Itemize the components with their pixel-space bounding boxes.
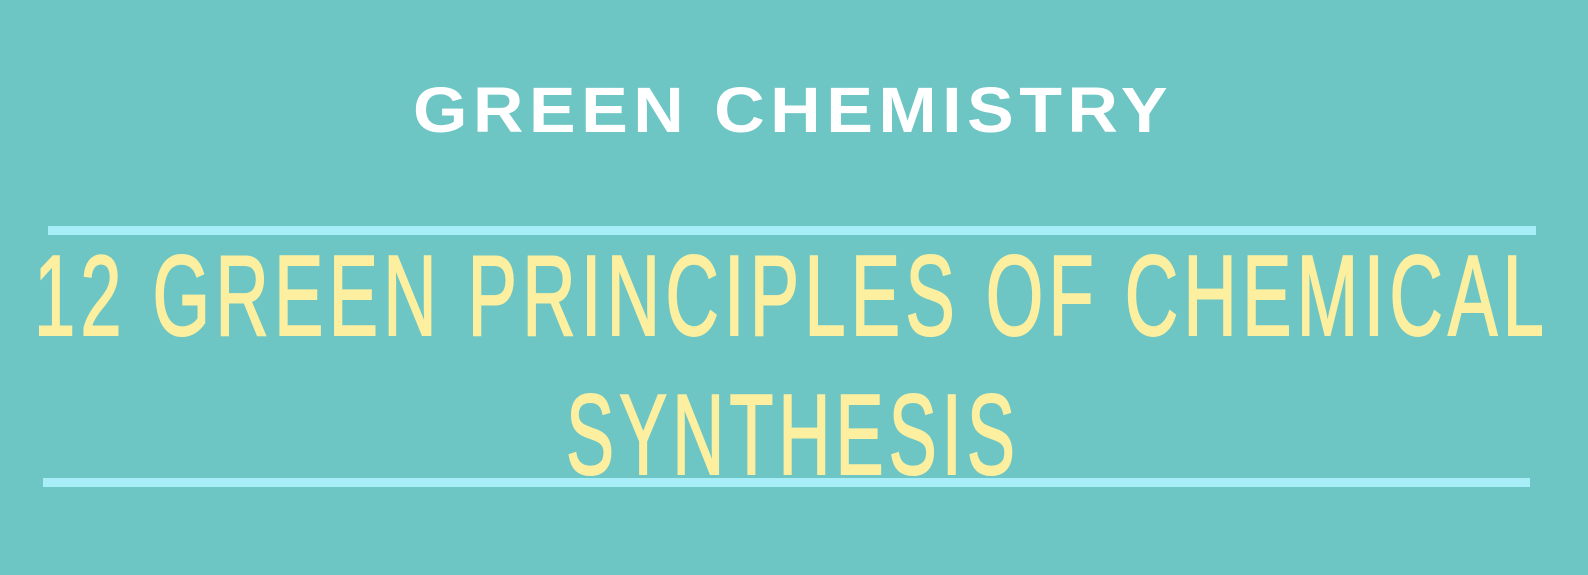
subtitle: green chemistry: GREEN CHEMISTRY: [413, 74, 1173, 146]
title: SYNTHESIS: [566, 372, 1020, 499]
title: [34, 233, 1549, 499]
